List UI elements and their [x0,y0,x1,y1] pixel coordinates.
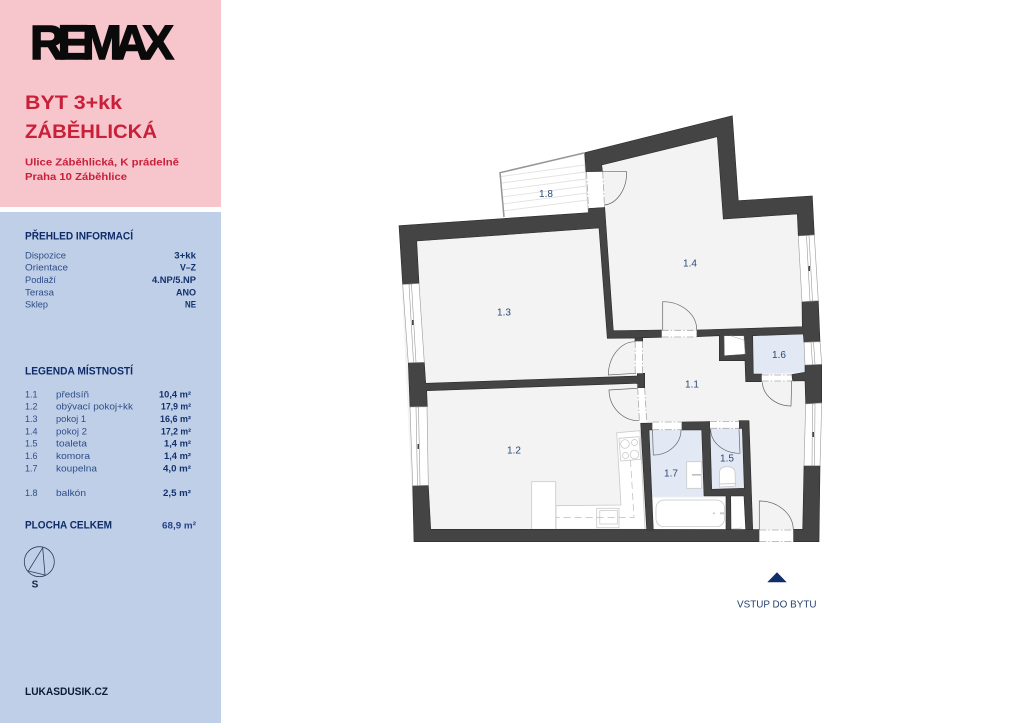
room legend table: 1.1 [25,389,38,399]
walls [399,116,822,542]
overview table: NE [185,300,196,310]
room numbers: 1.8 [539,189,553,200]
room legend table: 10,4 m² [159,389,191,399]
panel: information sidebar [0,212,221,723]
overview table: Orientace [25,263,68,273]
overview table: Sklep [25,300,48,310]
balcony 1.8 [500,153,588,217]
room legend table: koupelna [56,463,97,473]
address: Ulice Záběhlická, K prádelně [25,157,179,169]
light blue floors: bathroom, toilet, storage [649,334,805,497]
floor plan [399,116,822,542]
room legend table: 1.5 [25,439,38,449]
overview table: Dispozice [25,250,66,260]
total area [25,519,196,531]
title [25,92,157,143]
room numbers: 1.1 [685,380,699,390]
total area: 68,9 m² [162,520,196,531]
room legend table: 2,5 m² [163,488,191,498]
room legend table: 1.7 [25,463,38,473]
total area: PLOCHA CELKEM [25,519,112,531]
room legend table: 1,4 m² [164,439,191,449]
room legend table: pokoj 2 [56,426,87,436]
room legend table: 16,6 m² [160,414,191,424]
room numbers: 1.7 [664,468,678,480]
overview table: ANO [176,287,196,297]
overview table: 4.NP/5.NP [152,275,196,285]
entrance marker: VSTUP DO BYTU [737,599,816,611]
overview table: Terasa [25,287,54,297]
room numbers: 1.5 [720,454,734,464]
doors [586,172,793,542]
room legend table: 4,0 m² [163,463,191,473]
panel: header [0,0,221,207]
icon: compass [24,547,54,590]
website: LUKASDUSIK.CZ [25,686,108,698]
overview table: Podlaží [25,275,57,285]
room legend table: toaleta [56,439,87,449]
icon: compass: S [32,579,39,590]
logo: RE/MAX: REMAX [30,17,174,70]
title: BYT 3+kk [25,92,122,114]
address: Praha 10 Záběhlice [25,171,127,183]
overview table: 3+kk [174,250,197,260]
room legend table: 1.6 [25,451,38,461]
room legend table [25,389,191,498]
overview table: V–Z [180,263,196,273]
room numbers: 1.2 [507,446,521,456]
room legend table: 17,9 m² [161,402,191,412]
room legend table: 1.8 [25,488,38,498]
room legend table: 1.4 [25,426,38,436]
heading: room legend: LEGENDA MÍSTNOSTÍ [25,364,134,377]
kitchen units [532,431,645,529]
heading: overview: PŘEHLED INFORMACÍ [25,229,134,242]
address [25,157,179,183]
room numbers: 1.3 [497,308,511,318]
room numbers [497,189,786,480]
room legend table: komora [56,451,90,461]
title: ZÁBĚHLICKÁ [25,119,157,143]
room legend table: 1.2 [25,402,38,412]
room legend table: balkón [56,488,86,498]
bathroom fixtures [653,462,746,530]
overview table [25,250,197,310]
room legend table: pokoj 1 [56,414,86,424]
windows [403,235,822,486]
room numbers: 1.6 [772,350,786,361]
room legend table: obývací pokoj+kk [56,402,134,412]
room legend table: 17,2 m² [161,426,191,436]
room legend table: předsíň [56,389,89,399]
room numbers: 1.4 [683,258,697,270]
entrance marker [737,572,816,611]
room legend table: 1,4 m² [164,451,191,461]
room legend table: 1.3 [25,414,38,424]
